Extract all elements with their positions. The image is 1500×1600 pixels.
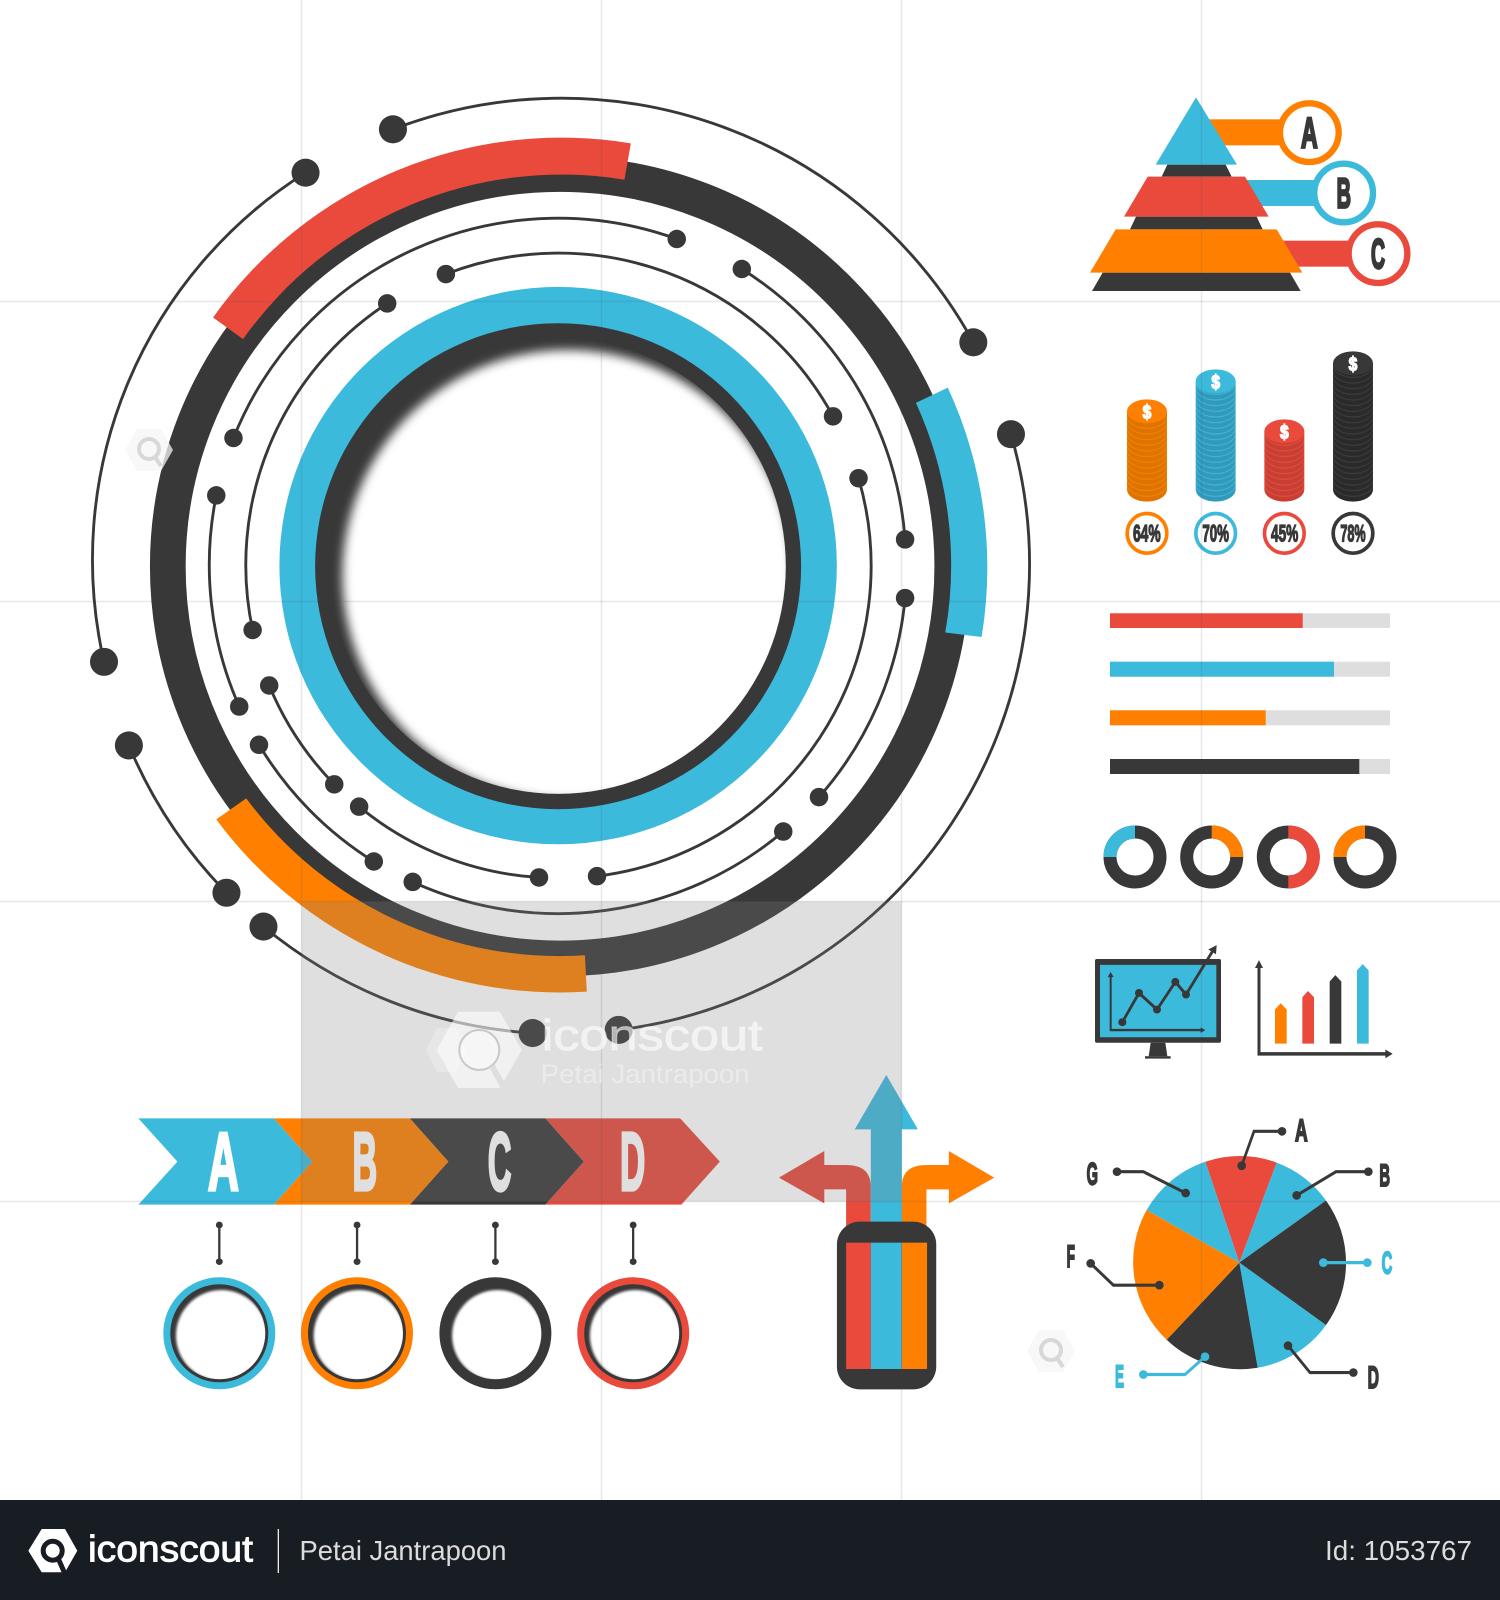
pie label G: G xyxy=(1087,1158,1098,1192)
coin stack 70%: 70% xyxy=(1202,520,1229,547)
tag C xyxy=(1273,224,1407,283)
pie label B xyxy=(1292,1159,1390,1200)
lower right charts xyxy=(1067,945,1393,1396)
blue inner ring xyxy=(279,287,837,844)
red left arrow xyxy=(779,1151,871,1227)
pie label G xyxy=(1087,1158,1190,1197)
watermark grey panel xyxy=(302,902,902,1202)
coin stack 64%: 64% xyxy=(1133,521,1161,548)
thin connector arcs xyxy=(92,98,1029,1033)
ribbon B xyxy=(274,1115,448,1208)
coin stack 64% xyxy=(1127,399,1167,553)
tag B: B xyxy=(1337,170,1351,216)
ribbon D: D xyxy=(620,1115,645,1208)
red arc segment xyxy=(213,138,631,339)
watermark logo and text xyxy=(426,1011,763,1089)
footer bar xyxy=(0,1500,1500,1600)
ring A xyxy=(163,1277,275,1389)
footer brand: iconscout xyxy=(88,1529,254,1570)
tag A xyxy=(1207,103,1339,162)
blue arc segment xyxy=(916,388,987,637)
pie label D: D xyxy=(1368,1361,1379,1396)
footer author: Petai Jantrapoon xyxy=(300,1535,506,1566)
pie label D xyxy=(1284,1341,1379,1396)
coin stack 45% xyxy=(1264,419,1304,553)
pie label E: E xyxy=(1115,1360,1124,1394)
small watermark icon right xyxy=(1027,1330,1075,1372)
ring D xyxy=(577,1277,689,1389)
connector ticks xyxy=(216,1222,637,1265)
footer id: Id: 1053767 xyxy=(1325,1535,1472,1566)
watermark logo and text: Petai Jantrapoon xyxy=(541,1059,750,1089)
thick dark ring xyxy=(168,174,952,958)
ribbon C xyxy=(410,1115,584,1208)
pie label C xyxy=(1319,1247,1392,1281)
ring C xyxy=(439,1277,551,1389)
coin stack 78% xyxy=(1333,351,1373,553)
tag B xyxy=(1240,164,1373,222)
blue up arrow xyxy=(855,1075,918,1227)
coin stack 64%: $ xyxy=(1143,403,1152,424)
coin stack 78%: 78% xyxy=(1340,520,1366,547)
ribbon B: B xyxy=(352,1115,377,1208)
connector end dots xyxy=(90,115,1025,1047)
tag A: A xyxy=(1301,109,1318,157)
pie label C: C xyxy=(1382,1247,1392,1281)
orange right arrow xyxy=(902,1151,994,1227)
ribbon C: C xyxy=(488,1115,511,1208)
circular diagram xyxy=(90,98,1029,1047)
small watermark icon left xyxy=(125,429,173,471)
orange arc segment xyxy=(216,798,587,992)
ribbon A xyxy=(138,1115,312,1208)
pie label F: F xyxy=(1067,1240,1075,1275)
ribbon D xyxy=(545,1115,720,1208)
pie label F xyxy=(1067,1240,1164,1290)
arrow bar chart xyxy=(1255,960,1393,1058)
progress bars xyxy=(1110,613,1390,774)
coin stack 78%: $ xyxy=(1349,355,1358,376)
coin stack 45%: 45% xyxy=(1271,520,1298,547)
ring B xyxy=(301,1277,413,1389)
pie label B: B xyxy=(1379,1159,1390,1193)
watermark logo and text: iconscout xyxy=(542,1011,763,1060)
pie label E xyxy=(1115,1352,1209,1394)
pie label A: A xyxy=(1295,1114,1308,1149)
ribbon arrows and direction arrows xyxy=(138,1075,994,1389)
footer logo xyxy=(28,1529,77,1574)
donut charts xyxy=(1110,832,1390,882)
coin stack 70%: $ xyxy=(1211,373,1220,394)
tag C: C xyxy=(1371,231,1385,277)
pie label A xyxy=(1237,1114,1308,1170)
pie chart xyxy=(1133,1156,1346,1369)
dark inner ring with white centre xyxy=(315,323,801,809)
coin stack 45%: $ xyxy=(1280,423,1289,444)
coin stack 70% xyxy=(1196,369,1236,553)
ribbon A: A xyxy=(208,1115,239,1208)
monitor with line chart xyxy=(1095,945,1221,1059)
pyramid with A B C tags xyxy=(1090,97,1407,553)
arrow handle xyxy=(837,1222,936,1389)
pyramid layers xyxy=(1090,97,1302,291)
